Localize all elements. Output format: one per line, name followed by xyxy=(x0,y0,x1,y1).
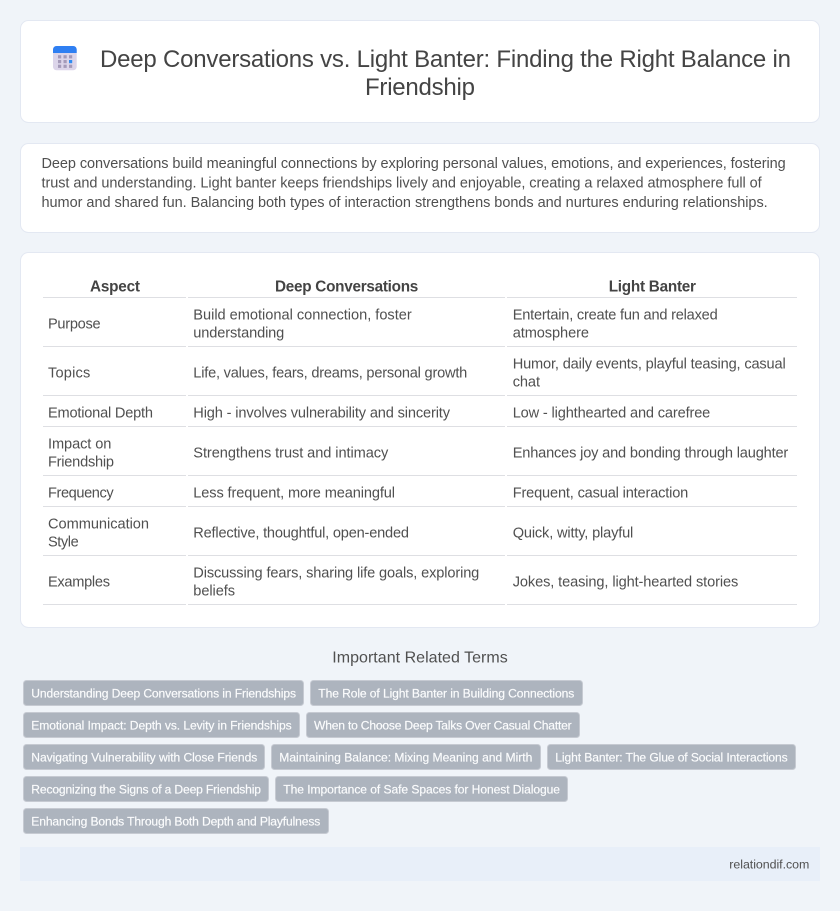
table row: Emotional Depth xyxy=(43,405,797,427)
table row: Frequency: Frequency xyxy=(48,485,114,501)
tag: Recognizing the Signs xyxy=(24,776,268,802)
table row: Communication Style: Style xyxy=(48,534,79,550)
tag: Safe Spaces: The Importance of Safe Spaces for Honest Dialogue xyxy=(283,782,560,796)
tag: Understanding Deep Conversations in Friendships xyxy=(24,680,304,706)
footer: relationdif.com xyxy=(729,857,809,871)
text block: introduction paragraph xyxy=(42,156,786,211)
tag: Maintaining Balance: Maintaining Balance: Mixing Meaning and Mirth xyxy=(279,750,532,764)
panel: title header xyxy=(20,20,820,122)
tag: When to Choose Deep Talks: When to Choose Deep Talks Over Casual Chatter xyxy=(314,718,572,732)
tag: Safe Spaces xyxy=(276,776,568,802)
tag: The Role of Light Banter in Building Connections xyxy=(310,680,582,706)
table row: Emotional Depth: High - involves vulnerability and sincerity xyxy=(193,405,451,421)
table row: Communication Style: Reflective, thoughtful, open-ended xyxy=(193,525,409,541)
panel: comparison table xyxy=(20,252,820,628)
tag: Understanding Deep Conversations in Friendships: Understanding Deep Conversations in Friendships xyxy=(31,686,296,700)
table row: Impact on Friendship: Impact on xyxy=(48,436,111,452)
table row: Purpose: Entertain, create fun and relaxed xyxy=(513,307,718,323)
heading: Important Related Terms: Important Related Terms xyxy=(332,650,508,667)
table row: Frequency xyxy=(43,485,797,507)
tag: Light Banter glue: Light Banter: The Glue of Social Interactions xyxy=(555,750,788,764)
table row: Impact on Friendship: Friendship xyxy=(48,454,114,470)
title: Deep Conversations vs. Light Banter: Finding the Right Balance in xyxy=(100,46,791,73)
tag: Navigating Vulnerability: Navigating Vulnerability with Close Friends xyxy=(31,750,257,764)
table header row: Deep Conversations xyxy=(275,278,418,296)
table row: Frequency: Less frequent, more meaningful xyxy=(193,485,395,501)
table row: Purpose xyxy=(43,307,797,347)
tag: The Role of Light Banter in Building Connections: The Role of Light Banter in Building Connections xyxy=(318,686,574,700)
related term tags xyxy=(24,680,796,834)
table row: Examples: Examples xyxy=(48,574,110,590)
tag: Emotional Impact: Emotional Impact: Depth vs. Levity in Friendships xyxy=(31,718,292,732)
table row: Frequency: Frequent, casual interaction xyxy=(513,485,688,501)
tag: When to Choose Deep Talks xyxy=(306,712,580,738)
icon: calendar xyxy=(53,46,77,70)
table row: Topics: Topics xyxy=(48,365,90,381)
table header row: Light Banter xyxy=(609,278,696,296)
tag: Maintaining Balance xyxy=(272,744,540,770)
table row: Purpose: Build emotional connection, foster xyxy=(193,307,412,323)
table row: Impact on Friendship xyxy=(43,436,797,476)
title xyxy=(100,46,791,101)
text block: introduction paragraph: Deep conversations build meaningful connections by exploring personal values, emotions, and experiences, fostering xyxy=(42,156,786,172)
footer xyxy=(20,847,820,881)
table row: Communication Style xyxy=(43,516,797,556)
table row: Communication Style: Communication xyxy=(48,516,149,532)
tag: Enhancing Bonds xyxy=(24,808,328,834)
table header row xyxy=(43,278,797,298)
title: Friendship xyxy=(365,74,475,101)
panel: introduction xyxy=(20,144,820,232)
text block: introduction paragraph: humor and shared fun. Balancing both types of interaction strengthens bonds and nurtures enduring relationships. xyxy=(42,195,768,211)
table row: Emotional Depth: Low - lighthearted and carefree xyxy=(513,405,710,421)
table row: Emotional Depth: Emotional Depth xyxy=(48,405,153,421)
table header row: Aspect xyxy=(90,278,140,296)
tag: Navigating Vulnerability xyxy=(24,744,264,770)
text block: introduction paragraph: trust and understanding. Light banter keeps friendships lively and enjoyable, creating a relaxed atmosphere full of xyxy=(42,176,763,192)
table row: Topics xyxy=(43,356,797,396)
table row: Examples xyxy=(43,565,797,605)
tag: Enhancing Bonds: Enhancing Bonds Through Both Depth and Playfulness xyxy=(31,814,320,828)
table row: Topics: Humor, daily events, playful teasing, casual xyxy=(513,356,786,372)
table row: Examples: beliefs xyxy=(193,583,235,599)
table row: Impact on Friendship: Strengthens trust and intimacy xyxy=(193,445,389,461)
table row: Purpose: atmosphere xyxy=(513,325,589,341)
tag: Emotional Impact xyxy=(24,712,300,738)
table row: Purpose: Purpose xyxy=(48,316,101,332)
table row: Examples: Discussing fears, sharing life goals, exploring xyxy=(193,565,479,581)
table row: Impact on Friendship: Enhances joy and bonding through laughter xyxy=(513,445,788,461)
table row: Examples: Jokes, teasing, light-hearted stories xyxy=(513,574,738,590)
tag: Light Banter glue xyxy=(548,744,796,770)
table row: Topics: chat xyxy=(513,374,540,390)
table row: Purpose: understanding xyxy=(193,325,284,341)
table row: Communication Style: Quick, witty, playful xyxy=(513,525,633,541)
table row: Topics: Life, values, fears, dreams, personal growth xyxy=(193,365,467,381)
tag: Recognizing the Signs: Recognizing the Signs of a Deep Friendship xyxy=(31,782,261,796)
